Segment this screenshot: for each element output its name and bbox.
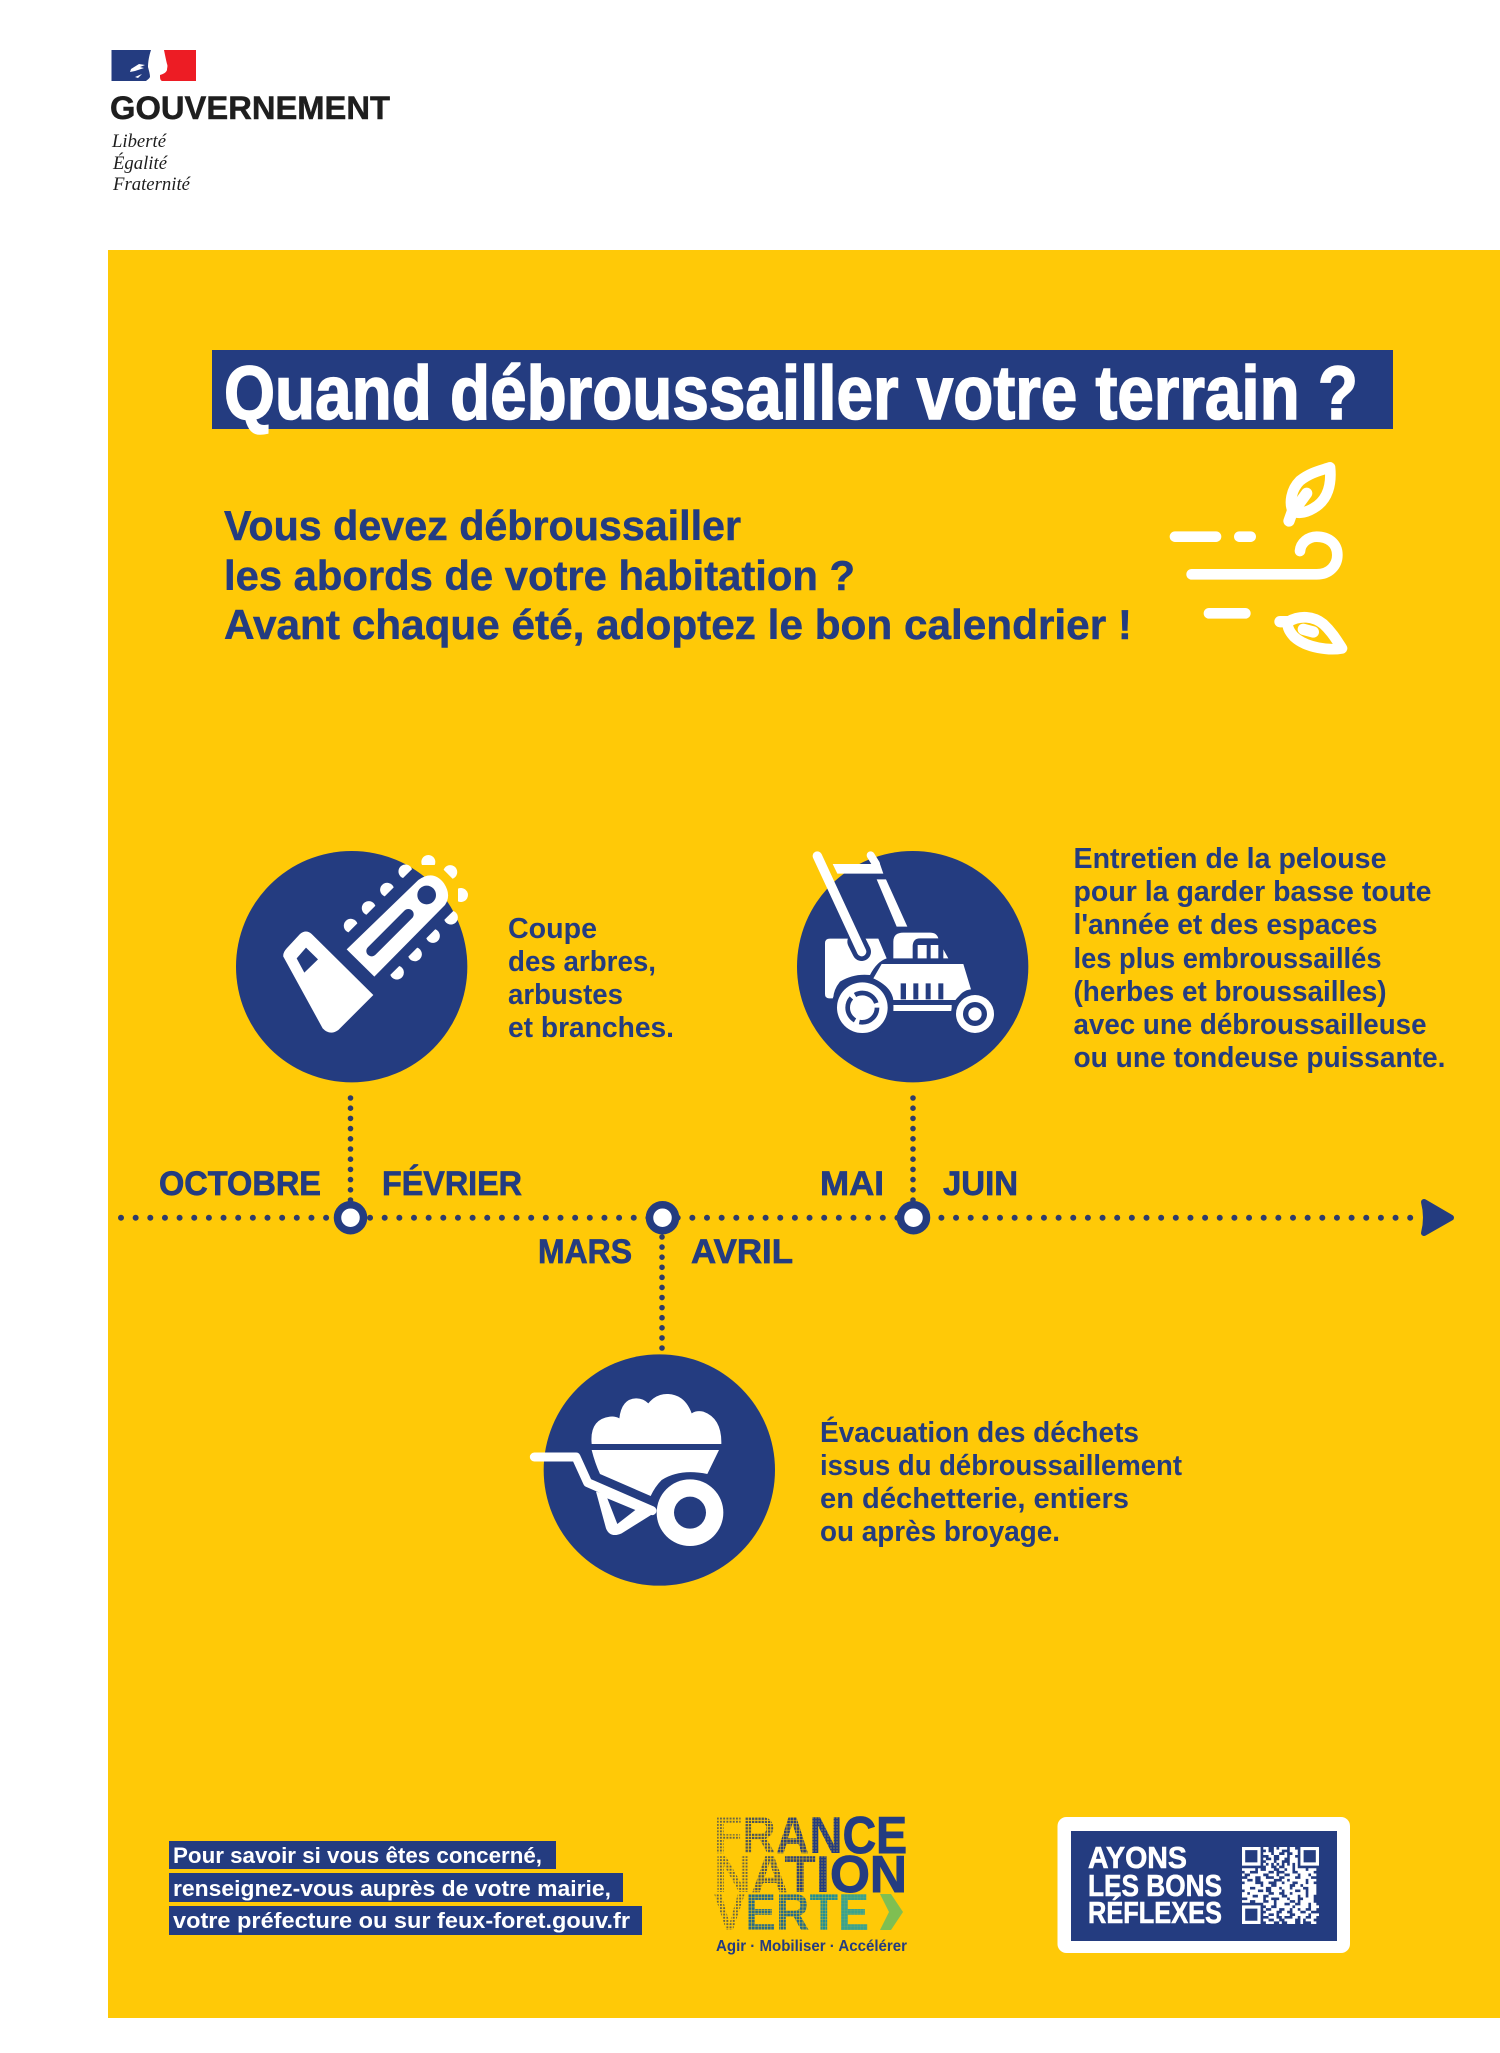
QR code [1242,1848,1319,1923]
description: lawn care: pour la garder basse toute [1074,876,1432,908]
title: Quand débroussailler votre terrain ? [224,351,1358,436]
icon: chainsaw [236,851,468,1082]
month labels: JUIN [943,1165,1018,1203]
timeline [121,1098,1451,1348]
month labels: MAI [820,1165,884,1203]
description: waste removal: issus du débroussaillement [820,1450,1182,1482]
flag with Marianne [112,50,196,81]
month labels: MARS [538,1233,632,1271]
callout text: RÉFLEXES [1088,1895,1222,1930]
step: wheelbarrow [534,1354,1182,1586]
description: waste removal: en déchetterie, entiers [820,1483,1129,1515]
motto: Égalité [112,152,169,174]
marker: may to june [900,1205,926,1231]
France Nation Verte logo: NATION [714,1846,907,1904]
icon: lawn mower [797,851,1028,1082]
description: cutting: des arbres, [508,946,656,978]
marker: march to april [650,1205,676,1231]
description: lawn care: l'année et des espaces [1074,909,1378,941]
callout text: LES BONS [1088,1868,1222,1903]
intro text [224,502,1132,648]
intro text: Vous devez débroussailler [224,502,741,549]
intro text: les abords de votre habitation ? [224,552,855,599]
step: lawn mower [797,843,1446,1082]
motto: Fraternité [112,174,192,195]
description: waste removal: ou après broyage. [820,1516,1060,1548]
dotted connector: chainsaw [348,1098,353,1200]
description: waste removal: Évacuation des déchets [820,1415,1139,1449]
QR callout [1058,1817,1350,1953]
description: cutting: arbustes [508,979,623,1011]
description: lawn care: (herbes et broussailles) [1074,976,1386,1008]
description: lawn care: Entretien de la pelouse [1074,843,1386,875]
description: lawn care: ou une tondeuse puissante. [1074,1042,1446,1074]
dotted connector: mower [910,1098,916,1200]
description: waste removal [820,1415,1182,1548]
description: cutting: et branches. [508,1012,674,1044]
France Nation Verte logo [714,1807,907,1955]
motto [111,131,192,195]
callout text [1088,1840,1222,1930]
month labels: AVRIL [691,1233,793,1271]
description: lawn care: avec une débroussailleuse [1074,1009,1426,1041]
footer note [169,1841,642,1935]
wordmark GOUVERNEMENT: GOUVERNEMENT [110,90,390,126]
month labels [159,1165,1018,1271]
intro text: Avant chaque été, adoptez le bon calendrier ! [224,601,1132,648]
dotted axis [121,1215,1414,1221]
description: lawn care: les plus embroussaillés [1074,943,1382,975]
tagline: Agir · Mobiliser · Accélérer [716,1938,907,1955]
yellow panel [108,250,1500,2018]
green chevron [880,1894,903,1930]
footer note: Pour savoir si vous êtes concerné, [173,1843,542,1868]
motto: Liberté [111,131,168,152]
icon: wind and leaves [1175,467,1342,649]
footer note: renseignez-vous auprès de votre mairie, [173,1876,611,1901]
month labels: FÉVRIER [382,1165,522,1203]
dotted connector: wheelbarrow [659,1237,665,1348]
callout text: AYONS [1088,1840,1187,1875]
description: cutting [508,913,674,1044]
footer note: votre préfecture ou sur feux-foret.gouv.fr [173,1908,630,1933]
step: chainsaw [236,851,674,1082]
month labels: OCTOBRE [159,1165,321,1203]
description: lawn care [1074,843,1446,1074]
government logo [110,50,390,195]
marker: october to february [338,1205,364,1231]
arrowhead [1424,1202,1451,1233]
description: cutting: Coupe [508,913,597,945]
France Nation Verte logo: FRANCE [714,1807,907,1865]
France Nation Verte logo: VERTE [714,1884,869,1942]
icon: wheelbarrow [534,1354,775,1586]
